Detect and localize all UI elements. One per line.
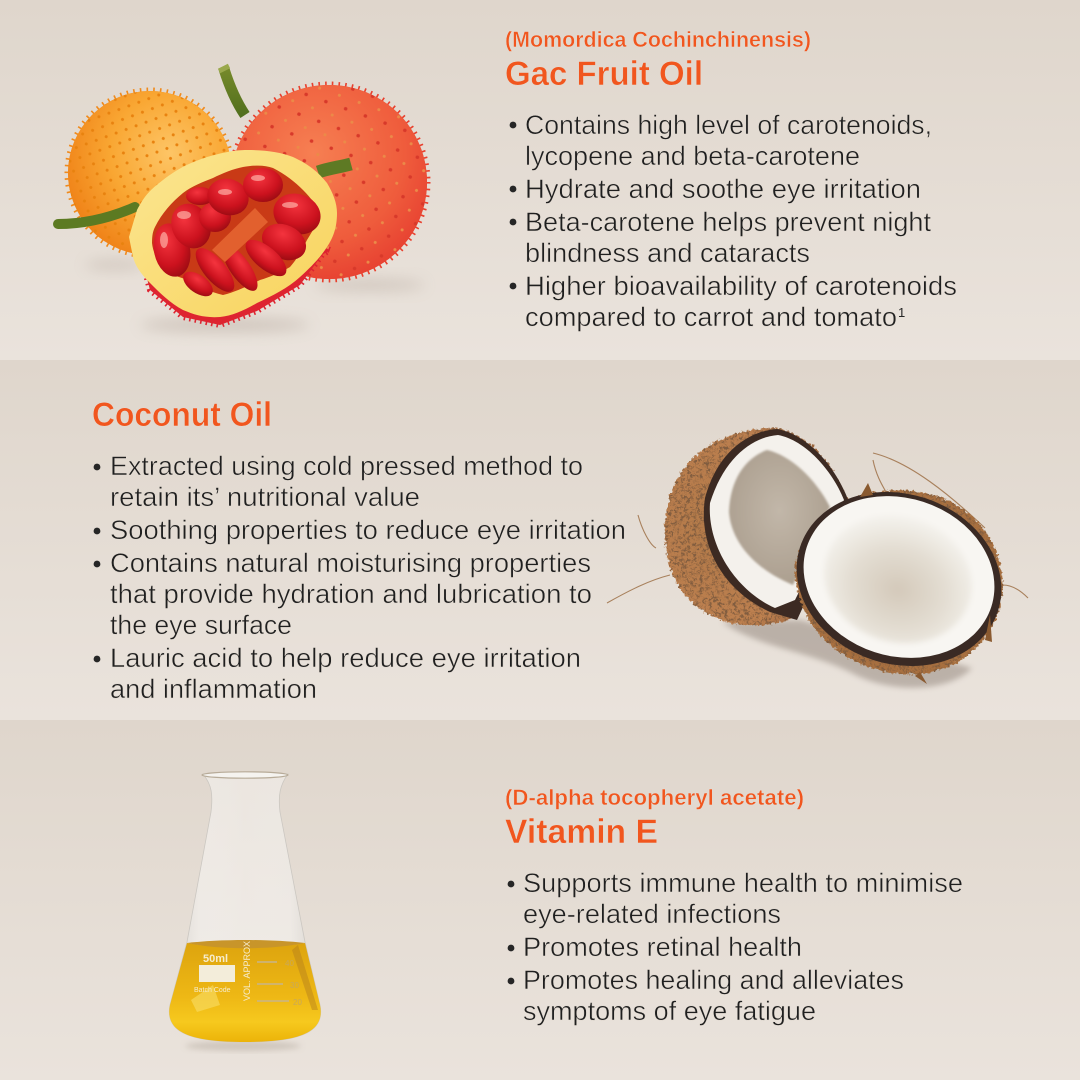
bullet list: gac fruit benefits: Contains high level of carotenoids, xyxy=(525,110,932,140)
illustration: flask of oil xyxy=(169,772,321,1051)
bullet list: gac fruit benefits xyxy=(510,110,957,332)
illustration: coconut halves xyxy=(607,428,1028,692)
heading: d-alpha tocopheryl acetate: (D-alpha tocopheryl acetate) xyxy=(505,785,804,810)
heading: momordica cochinchinensis: (Momordica Cochinchinensis) xyxy=(505,27,811,52)
panel: vitamin e xyxy=(0,720,1080,1080)
bullet list: vitamin e benefits: Promotes healing and alleviates xyxy=(523,965,904,995)
illustration: gac fruits xyxy=(58,66,427,332)
panel: gac fruit oil xyxy=(0,0,1080,360)
heading: vitamin e: Vitamin E xyxy=(505,813,658,851)
panel: coconut oil xyxy=(0,360,1080,720)
bullet list: vitamin e benefits: eye-related infections xyxy=(523,899,781,929)
bullet list: vitamin e benefits xyxy=(508,868,963,1026)
bullet list: gac fruit benefits: 1 xyxy=(898,305,905,320)
illustration: flask of oil: 20 xyxy=(293,998,302,1007)
illustration: flask of oil: VOL. APPROX xyxy=(242,941,252,1001)
bullet list: coconut benefits: and inflammation xyxy=(110,674,317,704)
heading: gac fruit oil: Gac Fruit Oil xyxy=(505,55,703,93)
illustration: flask of oil: Batch Code xyxy=(194,987,231,994)
bullet list: vitamin e benefits: Promotes retinal health xyxy=(523,932,802,962)
bullet list: coconut benefits: Contains natural moisturising properties xyxy=(110,548,591,578)
heading: coconut oil: Coconut Oil xyxy=(92,396,272,434)
bullet list: gac fruit benefits: Beta-carotene helps prevent night xyxy=(525,207,932,237)
bullet list: gac fruit benefits: blindness and cataracts xyxy=(525,238,810,268)
bullet list: vitamin e benefits: Supports immune health to minimise xyxy=(523,868,963,898)
bullet list: gac fruit benefits: lycopene and beta-carotene xyxy=(525,141,860,171)
bullet list: coconut benefits: Soothing properties to reduce eye irritation xyxy=(110,515,626,545)
bullet list: gac fruit benefits: compared to carrot and tomato xyxy=(525,302,897,332)
bullet list: coconut benefits: retain its’ nutritional value xyxy=(110,482,420,512)
bullet list: coconut benefits: the eye surface xyxy=(110,610,292,640)
illustration: flask of oil: 50ml xyxy=(203,953,228,965)
bullet list: coconut benefits: Extracted using cold pressed method to xyxy=(110,451,583,481)
illustration: flask of oil: 40 xyxy=(285,959,294,968)
bullet list: coconut benefits xyxy=(94,451,626,704)
bullet list: coconut benefits: that provide hydration and lubrication to xyxy=(110,579,592,609)
bullet list: gac fruit benefits: Higher bioavailability of carotenoids xyxy=(525,271,957,301)
bullet list: gac fruit benefits: Hydrate and soothe eye irritation xyxy=(525,174,921,204)
bullet list: vitamin e benefits: symptoms of eye fatigue xyxy=(523,996,816,1026)
illustration: flask of oil: 30 xyxy=(290,981,299,990)
bullet list: coconut benefits: Lauric acid to help reduce eye irritation xyxy=(110,643,581,673)
